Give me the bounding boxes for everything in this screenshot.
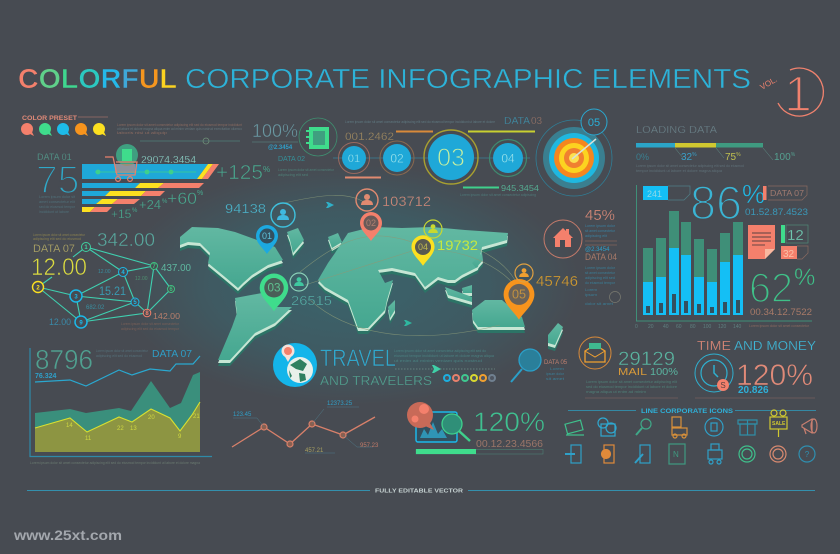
- icon: sale sign: [770, 410, 787, 437]
- marker 45746: 45746: [536, 273, 578, 290]
- step 01: [338, 142, 370, 174]
- panel: line corporate icons: [565, 408, 817, 464]
- panel: numbered steps: Lorem ipsum dolor sit amet consectetur adipiscing: [460, 193, 536, 197]
- panel: line chart: 957.23: [360, 443, 379, 449]
- panel: home stats: 45%: [585, 207, 615, 224]
- percent labels: +60: [167, 189, 197, 208]
- graph nodes: 3: [74, 294, 78, 300]
- panel: 100% notebook: Lorem ipsum dolor sit amet consectetur: [278, 168, 335, 172]
- graph nodes: 1: [84, 245, 88, 251]
- graph nodes: 8: [145, 311, 149, 317]
- panel: bar chart: Lorem ipsum dolor sit amet consectetur: [749, 324, 810, 328]
- percent labels: %: [197, 190, 203, 197]
- route lines: [284, 195, 520, 336]
- graph nodes: 7: [152, 264, 156, 270]
- icon: help: ?: [805, 450, 810, 459]
- icon: chart screen: [416, 412, 457, 442]
- axes: [30, 348, 212, 456]
- value labels: 9: [178, 434, 182, 440]
- value labels: 21: [193, 414, 200, 420]
- map glow: [120, 165, 580, 405]
- panel: home stats: Lorem: [585, 288, 597, 292]
- icon: notebook: [299, 118, 337, 156]
- icon: target: [536, 109, 612, 196]
- graph nodes: 6: [169, 287, 173, 293]
- volume badge: VOL.: [758, 75, 779, 92]
- heading: LINE CORPORATE ICONS: [641, 408, 734, 415]
- value labels: 14: [66, 423, 73, 429]
- big percent 62: 62: [749, 264, 793, 311]
- icon: travel globe: [273, 343, 317, 387]
- panel: network graph: Lorem ipsum dolor sit amet consectetur: [121, 322, 180, 326]
- text: [394, 349, 494, 363]
- panel: bar chart: [635, 176, 815, 330]
- title: CORPORATE INFOGRAPHIC ELEMENTS: [185, 63, 751, 94]
- text block: top intro: laboris nisi ut aliquip: [117, 131, 167, 135]
- marker 103712: 103712: [382, 193, 431, 209]
- panel: home stats: adipiscing elit sed: [585, 276, 615, 280]
- panel: loading data: tempor incididunt ut labore et dolore magna aliqua: [636, 169, 722, 173]
- marker 26515: [290, 273, 332, 308]
- icon: house: [544, 220, 582, 258]
- land shadow: [180, 233, 563, 366]
- panel: line chart: 457.21: [305, 448, 324, 454]
- panel: network graph: adipiscing elit sed do eiusmod tempor: [121, 327, 180, 331]
- panel: line chart: 12373.25: [327, 401, 353, 407]
- panel: numbered steps: 03: [531, 116, 543, 127]
- panel: data 05 search: Lorem: [550, 367, 564, 371]
- blue bars: [643, 248, 743, 315]
- panel: network graph: [31, 230, 191, 331]
- pin 04: [411, 235, 435, 266]
- value: 00.34.12.7522: [750, 307, 812, 317]
- value: 01.52.87.4523: [745, 207, 808, 217]
- icon: megaphone: [802, 419, 817, 434]
- watermark: www.25xt.com: [13, 527, 122, 543]
- big number 75: 75: [36, 159, 79, 202]
- panel: area chart: Lorem ipsum dolor sit amet consectetur: [96, 349, 149, 353]
- x axis labels: 40: [663, 324, 669, 330]
- percent labels: %: [162, 199, 168, 205]
- small note: [39, 195, 76, 214]
- percent labels: %: [263, 165, 270, 174]
- panel: network graph: adipiscing elit sed do eiusmod: [33, 237, 81, 241]
- panel: area chart: 76.324: [35, 373, 57, 380]
- icon: trolley: [708, 444, 722, 464]
- footer rule: [27, 490, 815, 492]
- panel: travel: AND TRAVELERS: [320, 373, 432, 388]
- text: Lorem ipsum dolor sit amet consectetur adipiscing elit sed do: [394, 349, 486, 353]
- value: 001.2462: [345, 131, 394, 143]
- panel: mail: [579, 337, 678, 398]
- panel: home stats: adipiscing elit: [585, 234, 607, 238]
- tag 32: 32: [783, 249, 795, 260]
- panel: network graph: 12.00: [31, 254, 87, 281]
- panel: mail: MAIL: [618, 367, 648, 378]
- x axis labels: 100: [703, 324, 712, 330]
- volume badge: 1: [784, 66, 812, 122]
- panel: home stats: sit amet consectetur: [585, 271, 616, 275]
- panel: analytics: 00.12.23.4566: [476, 439, 543, 450]
- step 04: [490, 140, 526, 176]
- panel: time and money: TIME: [697, 338, 731, 353]
- panel: network graph: Lorem ipsum dolor sit amet consectetur: [33, 233, 86, 237]
- panel: area chart: adipiscing elit sed do eiusmod: [96, 354, 142, 358]
- panel: area chart: Lorem ipsum dolor sit amet consectetur adipiscing elit sed do eiusmod tempor incididunt ut labore et dolore magna: [30, 461, 200, 465]
- panel: home stats: do eiusmod tempor: [585, 281, 616, 285]
- percent labels: %: [132, 208, 138, 214]
- small note: incididunt ut labore: [39, 210, 69, 214]
- icon: help: [799, 446, 815, 462]
- footer caption: FULLY EDITABLE VECTOR: [375, 488, 463, 494]
- step 03: [424, 130, 478, 184]
- panel: network graph: 15.21: [99, 284, 126, 298]
- step 01: 01: [348, 153, 360, 165]
- panel: mail: 100%: [650, 367, 678, 378]
- icon: phone: [602, 445, 614, 463]
- panel: home stats: sit amet consectetur: [585, 229, 616, 233]
- panel: loading data: Lorem ipsum dolor sit amet consectetur adipiscing elit sed do eiusmod: [636, 164, 744, 168]
- panel: network graph: 12.00: [98, 269, 111, 275]
- panel: data 05 search: [511, 349, 568, 382]
- graph labels: 437.00: [161, 263, 191, 274]
- panel: home stats: ipsum: [585, 293, 597, 297]
- panel: network graph: 12.00: [49, 317, 71, 327]
- value labels: 22: [117, 426, 124, 432]
- step 04: 04: [501, 152, 515, 166]
- tag data 07: [763, 186, 807, 200]
- marker 19732: [424, 220, 478, 253]
- panel: color preset: COLOR PRESET: [22, 115, 77, 122]
- panel: mail: magna aliqua ut enim ad minim: [586, 390, 646, 394]
- big percent: 86: [690, 176, 742, 229]
- panel: loading data: 32: [681, 152, 692, 163]
- pin 03: 03: [267, 282, 281, 295]
- panel: network graph: 142.00: [153, 312, 181, 321]
- panel: 100% notebook: [252, 118, 337, 177]
- panel: network graph: DATA 07: [33, 243, 75, 255]
- pin 02: 02: [366, 218, 376, 228]
- panel: loading data: %: [692, 152, 697, 158]
- icon: document: N: [673, 450, 679, 459]
- x axis labels: [635, 324, 742, 330]
- marker 19732: 19732: [437, 237, 478, 253]
- panel: color preset: [21, 115, 108, 136]
- tag data 07: DATA 07: [770, 189, 805, 198]
- graph nodes: [32, 242, 174, 328]
- icon: dial: [705, 418, 723, 436]
- small pins: [443, 374, 496, 382]
- text block: top intro: ut labore et dolore magna aliqua enim ad minim veniam quis nostrud exercitation ullamco: [117, 127, 242, 131]
- panel: network graph: 682.02: [86, 305, 105, 311]
- pin 01: 01: [262, 231, 272, 241]
- percent labels: +125: [216, 162, 263, 184]
- small note: amet consectetur elit: [39, 200, 75, 204]
- panel: loading data: [636, 125, 796, 173]
- value labels: 20: [148, 415, 155, 421]
- icon: search: [636, 419, 651, 435]
- value: 29074.3454: [141, 155, 196, 166]
- panel: analytics: [407, 402, 545, 454]
- small note: sed do eiusmod tempor: [39, 205, 76, 209]
- panel: mail: 29129: [618, 349, 675, 370]
- olive area: [35, 402, 200, 452]
- panel: bar chart: %: [742, 179, 765, 209]
- step 02: [380, 141, 414, 175]
- panel: home stats: dolor sit amet: [585, 302, 613, 306]
- x axis labels: 60: [676, 324, 682, 330]
- icon: document: [748, 225, 775, 259]
- panel: home stats: DATA 04: [585, 252, 617, 262]
- text: eiusmod tempor incididunt ut labore et dolore magna aliqua: [394, 354, 494, 358]
- panel: home stats: Lorem ipsum dolor: [585, 224, 616, 228]
- panel: 100% notebook: adipiscing elit sed: [278, 173, 308, 177]
- x axis labels: 20: [648, 324, 654, 330]
- icon: gift: [738, 420, 757, 435]
- data 01 heading: DATA 01: [37, 152, 72, 162]
- panel: time and money: [695, 338, 816, 398]
- volume badge: [758, 66, 823, 122]
- icon: question: [770, 446, 786, 462]
- icon: cards: [565, 420, 584, 435]
- land surface: [180, 227, 563, 360]
- green area: [35, 372, 200, 452]
- tag 32: [781, 246, 808, 260]
- heading number: 8796: [35, 344, 93, 375]
- pin 05: [504, 279, 534, 320]
- panel: network graph: 342.00: [97, 230, 155, 250]
- label: DATA 02: [278, 156, 305, 163]
- icon: magnifier: [442, 414, 470, 441]
- panel: loading data: LOADING DATA: [636, 125, 717, 136]
- text line: Lorem ipsum dolor sit amet consectetur adipiscing elit sed do eiusmod tempor incididunt ut labore et dolore: [345, 120, 495, 124]
- panel: time and money: 120%: [736, 359, 813, 392]
- icon: gears: [407, 402, 434, 430]
- panel: line chart: 123.45: [233, 412, 252, 418]
- axes: [636, 185, 812, 321]
- pin 03: [260, 274, 288, 311]
- panel: loading data: 100: [774, 152, 791, 163]
- panel: numbered steps: [333, 116, 543, 197]
- panel: shopping stats: [36, 144, 270, 221]
- icon: forklift: [672, 417, 687, 438]
- x axis labels: 140: [733, 324, 742, 330]
- panel: data 05 search: ipsum dolor: [546, 372, 565, 376]
- panel: 100% notebook: @2.3454: [268, 145, 293, 151]
- panel: bar chart: %: [794, 264, 815, 291]
- text block: top intro: Lorem ipsum dolor sit amet consectetur adipiscing elit sed do eiusmod tempor incididunt: [117, 123, 242, 127]
- panel: line chart: [232, 401, 379, 454]
- tag 12: 12: [787, 227, 804, 244]
- panel: loading data: 0%: [636, 152, 649, 162]
- panel: area chart: [30, 344, 212, 465]
- green bars: [643, 211, 743, 315]
- marker 26515: 26515: [291, 293, 332, 308]
- pin 05: 05: [512, 288, 526, 302]
- panel: world map: [180, 189, 578, 366]
- striped bars: [82, 164, 219, 212]
- heading: DATA: [504, 116, 530, 127]
- icon: face: [739, 446, 755, 462]
- marker 45746: [515, 264, 578, 290]
- icon: door: [565, 445, 581, 463]
- graph edges: [38, 247, 171, 322]
- x axis labels: 120: [718, 324, 727, 330]
- value: 945.3454: [501, 184, 540, 193]
- marker 103712: [356, 189, 431, 211]
- small note: Lorem ipsum dolor sit: [39, 195, 75, 199]
- pin 04: 04: [418, 242, 428, 252]
- icon: coins: [598, 418, 616, 436]
- panel: home stats: Lorem ipsum dolor: [585, 266, 616, 270]
- icon: sale sign: SALE: [772, 421, 786, 427]
- panel: data 05 search: DATA 05: [544, 360, 568, 366]
- x axis labels: 80: [690, 324, 696, 330]
- text block: top intro: [117, 123, 242, 144]
- marker 94138: 94138: [225, 201, 266, 216]
- tag 241: [643, 186, 690, 200]
- progress bar: [416, 449, 543, 454]
- icon: target: 05: [588, 117, 600, 129]
- graph nodes: 4: [121, 270, 125, 276]
- panel: mail: sed do eiusmod tempor incididunt ut labore et dolore: [586, 385, 677, 389]
- panel: home stats: @2.3454: [585, 247, 610, 253]
- icon: plane: [432, 365, 441, 373]
- yellow line: [35, 402, 200, 432]
- panel: loading data: 75: [725, 152, 736, 163]
- percent labels: +15: [111, 207, 132, 221]
- tag 12: [781, 225, 808, 244]
- marker 94138: [225, 201, 295, 227]
- graph nodes: 2: [36, 286, 40, 292]
- step 02: 02: [390, 152, 404, 166]
- value labels: 11: [85, 436, 92, 442]
- pin 01: [256, 225, 278, 254]
- graph nodes: 9: [79, 320, 83, 326]
- icon: tablet: [635, 445, 650, 463]
- value labels: [66, 414, 200, 442]
- value: 120%: [473, 407, 545, 437]
- value labels: 13: [130, 426, 137, 432]
- panel: area chart: DATA 07: [152, 349, 192, 360]
- tag 241: 241: [647, 189, 662, 199]
- pin 02: [360, 212, 382, 241]
- value 100%: 100%: [252, 121, 298, 141]
- icon: mail: [579, 337, 611, 369]
- inner marks: [646, 294, 740, 313]
- icon: document: [669, 444, 685, 464]
- step 03: 03: [437, 144, 465, 172]
- panel: home stats: [544, 207, 620, 306]
- panel: network graph: 12.00: [135, 276, 148, 282]
- title: COLORFUL: [18, 63, 177, 94]
- panel: loading data: %: [791, 152, 796, 158]
- x axis labels: 0: [635, 324, 638, 330]
- panel: data 05 search: sit amet: [546, 377, 564, 381]
- panel: travel: [273, 343, 496, 388]
- heading: TRAVEL: [320, 345, 396, 372]
- panel: time and money: 20.826: [738, 385, 769, 396]
- panel: time and money: AND MONEY: [734, 338, 816, 353]
- land rim: [180, 230, 563, 363]
- panel: loading data: %: [736, 152, 741, 158]
- blue line: [35, 356, 200, 386]
- percent labels: +24: [139, 197, 161, 212]
- icon: planes: [326, 202, 412, 326]
- percent labels: [111, 162, 270, 221]
- panel: mail: Lorem ipsum dolor sit amet consectetur adipiscing elit: [586, 380, 677, 384]
- graph nodes: 5: [133, 300, 137, 306]
- icon: clock: S: [720, 381, 726, 390]
- text: ut enim ad minim veniam quis nostrud: [394, 359, 482, 363]
- icon: shopping cart: [105, 144, 138, 181]
